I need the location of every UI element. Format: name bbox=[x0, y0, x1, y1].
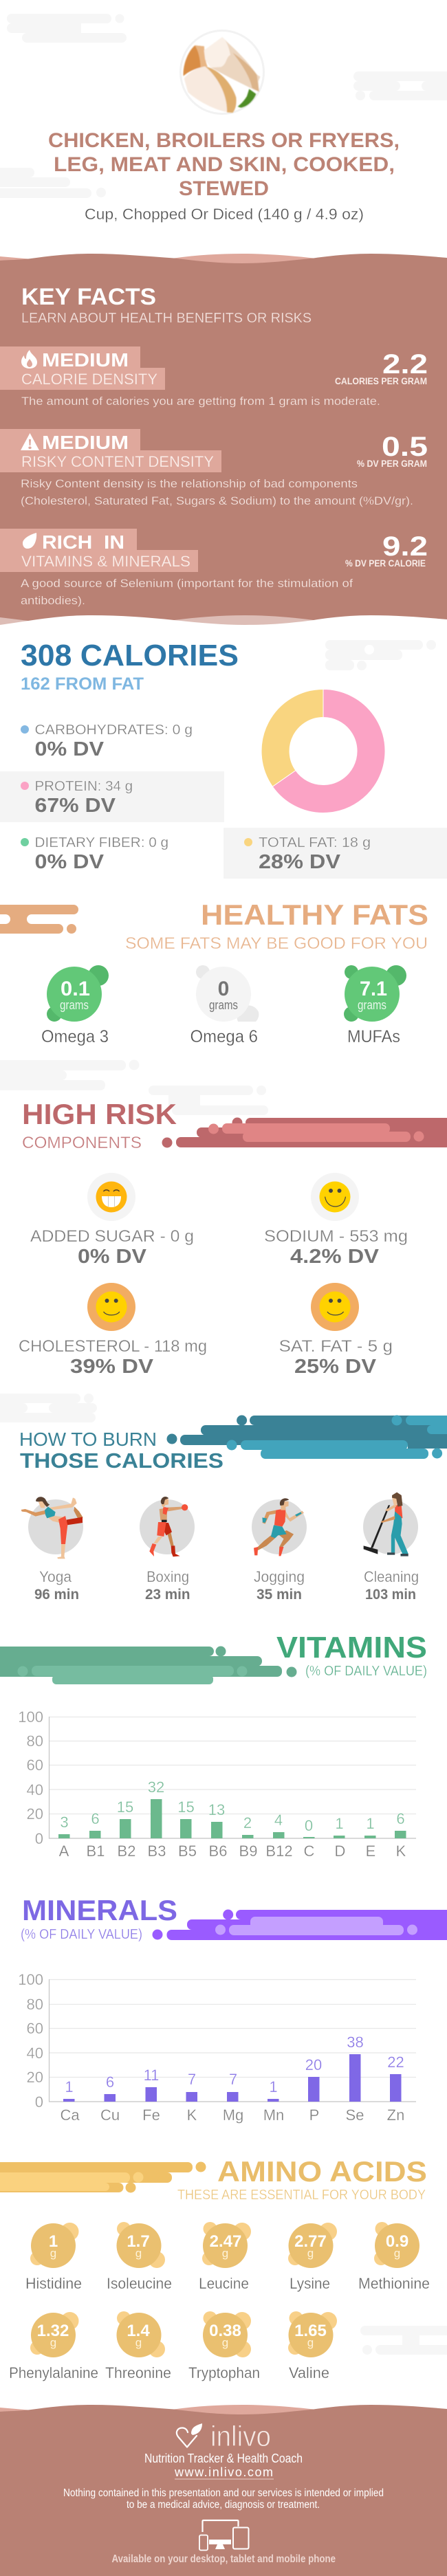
icon: yoga figure bbox=[21, 1497, 83, 1559]
website link: www.inlivo.com bbox=[174, 2465, 273, 2479]
activity: jogging: 35 min bbox=[257, 1587, 302, 1603]
heading: high risk: COMPONENTS bbox=[22, 1134, 142, 1152]
fact: rich in vitamins and minerals: antibodies). bbox=[21, 594, 85, 607]
heading: vitamins: (% OF DAILY VALUE) bbox=[305, 1664, 427, 1679]
donut chart bbox=[261, 689, 385, 813]
bar chart: vitamins: B6 bbox=[209, 1842, 227, 1860]
bar chart: minerals: 40 bbox=[27, 2045, 43, 2062]
bar chart: vitamins: 40 bbox=[27, 1781, 43, 1798]
bar chart: minerals: 7 bbox=[188, 2071, 196, 2088]
logo: inlivo: inlivo bbox=[210, 2420, 271, 2452]
icon: mild smile face bbox=[96, 1291, 127, 1323]
heading: healthy fats: HEALTHY FATS bbox=[201, 899, 428, 931]
serving size subtitle: Cup, Chopped Or Diced (140 g / 4.9 oz) bbox=[85, 206, 364, 223]
amino: phenylalanine: g bbox=[50, 2336, 56, 2349]
panel: minerals bbox=[18, 1894, 447, 2124]
macro: carbohydrates: CARBOHYDRATES: 0 g bbox=[34, 723, 193, 738]
bar chart: vitamins: 15 bbox=[117, 1798, 133, 1816]
bar chart: minerals: 20 bbox=[27, 2069, 43, 2086]
disclaimer bbox=[63, 2487, 384, 2511]
fact: calorie density: CALORIE DENSITY bbox=[21, 371, 157, 388]
icon: flame bbox=[21, 350, 37, 368]
bar chart: vitamins: 3 bbox=[60, 1814, 69, 1831]
panel: high risk components bbox=[0, 1060, 447, 1378]
amino: methionine: 0.9 bbox=[386, 2232, 408, 2251]
fact: rich in vitamins and minerals: A good source of Selenium (important for the stimulation of bbox=[21, 577, 353, 590]
bar chart: vitamins: 4 bbox=[274, 1812, 283, 1829]
panel: how to burn calories bbox=[0, 1394, 447, 1603]
activity: boxing: 23 min bbox=[145, 1587, 190, 1603]
fact: risky content density: MEDIUM bbox=[42, 432, 129, 453]
bar chart: vitamins: 80 bbox=[27, 1732, 43, 1750]
stat: omega 6: grams bbox=[209, 998, 238, 1012]
amino: valine bbox=[288, 2311, 337, 2381]
title: STEWED bbox=[179, 177, 269, 200]
fact: calorie density: 2.2 bbox=[382, 349, 428, 379]
bar chart: minerals: Zn bbox=[387, 2106, 404, 2124]
bar chart: minerals: 22 bbox=[387, 2054, 404, 2071]
macro: dietary fiber: 0% DV bbox=[34, 851, 105, 873]
bar chart: minerals: 1 bbox=[269, 2078, 278, 2095]
bar chart: vitamins: B5 bbox=[178, 1842, 197, 1860]
tagline: Nutrition Tracker & Health Coach bbox=[144, 2452, 303, 2465]
heading: high risk bbox=[22, 1098, 177, 1152]
fact: calorie density bbox=[0, 346, 428, 408]
amino: threonine: 1.4 bbox=[127, 2322, 150, 2340]
bar chart: minerals: Mg bbox=[223, 2106, 243, 2124]
risk: sodium: SODIUM - 553 mg bbox=[264, 1227, 408, 1246]
amino: threonine: Threonine bbox=[105, 2364, 171, 2381]
risk: saturated fat: SAT. FAT - 5 g bbox=[279, 1337, 393, 1356]
heading: vitamins: VITAMINS bbox=[276, 1631, 427, 1664]
banner: healthy fats bbox=[0, 905, 78, 934]
heading: healthy fats: SOME FATS MAY BE GOOD FOR YOU bbox=[125, 934, 428, 953]
heading: high risk: HIGH RISK bbox=[22, 1098, 177, 1130]
amino: lysine: g bbox=[307, 2247, 314, 2260]
risk: sodium: 4.2% DV bbox=[290, 1246, 380, 1268]
icon: grinning face bbox=[96, 1181, 127, 1213]
banner: how to burn bbox=[166, 1415, 447, 1459]
macro: total fat: 28% DV bbox=[259, 851, 341, 873]
macro: dietary fiber: DIETARY FIBER: 0 g bbox=[34, 835, 168, 850]
bar chart: minerals: Fe bbox=[142, 2106, 160, 2124]
stat: mufas bbox=[344, 965, 406, 1046]
macro: total fat: TOTAL FAT: 18 g bbox=[259, 835, 371, 850]
heading: calories bbox=[21, 639, 239, 694]
bar chart: vitamins: B1 bbox=[87, 1842, 105, 1860]
panel: footer bbox=[0, 2405, 447, 2576]
activity: yoga bbox=[21, 1497, 83, 1603]
bar chart: minerals: 60 bbox=[27, 2020, 43, 2037]
icon: mild smile face bbox=[319, 1291, 351, 1323]
bar chart: vitamins: 32 bbox=[148, 1779, 164, 1796]
icon: boxing figure bbox=[149, 1497, 188, 1556]
stat: omega 6: Omega 6 bbox=[190, 1027, 258, 1046]
bar chart: vitamins: D bbox=[335, 1842, 345, 1860]
amino: methionine bbox=[358, 2222, 430, 2292]
macro: protein: PROTEIN: 34 g bbox=[34, 779, 133, 794]
heading: how to burn those calories: THOSE CALORIES bbox=[20, 1449, 224, 1473]
heading: healthy fats bbox=[125, 899, 428, 953]
bar chart: minerals: 6 bbox=[106, 2073, 114, 2091]
amino: leucine: 2.47 bbox=[210, 2232, 241, 2251]
fact: rich in vitamins and minerals: RICH IN bbox=[42, 531, 124, 553]
fact: rich in vitamins and minerals: % DV PER CALORIE bbox=[345, 558, 426, 569]
title: LEG, MEAT AND SKIN, COOKED, bbox=[54, 153, 395, 176]
amino: valine: 1.65 bbox=[294, 2322, 327, 2340]
amino: leucine bbox=[199, 2222, 251, 2292]
macro: carbohydrates: 0% DV bbox=[34, 738, 105, 760]
activity: yoga: 96 min bbox=[34, 1587, 79, 1603]
heading: amino acids bbox=[177, 2155, 427, 2203]
stat: omega 6: 0 bbox=[218, 978, 229, 1000]
bar chart: vitamins: 100 bbox=[18, 1708, 43, 1726]
availability note: Available on your desktop, tablet and mobile phone bbox=[111, 2553, 336, 2565]
icon: smiling face bbox=[319, 1181, 351, 1213]
activity: jogging: Jogging bbox=[254, 1568, 305, 1585]
bar chart: minerals: 38 bbox=[347, 2034, 364, 2051]
amino: histidine: g bbox=[50, 2247, 56, 2260]
amino: valine: g bbox=[307, 2336, 314, 2349]
heading: minerals bbox=[21, 1894, 177, 1942]
bar chart: minerals bbox=[18, 1971, 416, 2124]
bar chart: vitamins: 60 bbox=[27, 1757, 43, 1774]
heading: amino acids: AMINO ACIDS bbox=[217, 2155, 427, 2188]
logo: inlivo bbox=[177, 2420, 271, 2452]
disclaimer: Nothing contained in this presentation and our services is intended or implied bbox=[63, 2487, 384, 2499]
heading: minerals: MINERALS bbox=[22, 1894, 177, 1926]
fact: calorie density: The amount of calories you are getting from 1 gram is moderate. bbox=[21, 395, 380, 408]
bar chart: vitamins bbox=[18, 1708, 416, 1860]
panel: key facts bbox=[0, 254, 447, 630]
fact: rich in vitamins and minerals bbox=[0, 529, 428, 607]
amino: phenylalanine: Phenylalanine bbox=[9, 2364, 98, 2381]
panel: healthy fats bbox=[0, 899, 428, 1046]
bar chart: minerals: 1 bbox=[65, 2078, 74, 2095]
stat: omega 3 bbox=[41, 965, 109, 1046]
fact: rich in vitamins and minerals: 9.2 bbox=[382, 531, 428, 562]
panel: calories bbox=[0, 639, 447, 879]
stat: omega 6 bbox=[190, 965, 259, 1046]
banner: high risk bbox=[162, 1118, 447, 1148]
risk: cholesterol bbox=[19, 1283, 207, 1378]
bar chart: vitamins: B3 bbox=[148, 1842, 166, 1860]
bar chart: minerals: K bbox=[187, 2106, 197, 2124]
risk: sodium bbox=[264, 1173, 408, 1268]
heading: vitamins bbox=[276, 1631, 427, 1679]
panel: header bbox=[0, 14, 447, 223]
bar chart: vitamins: C bbox=[304, 1842, 315, 1860]
icon: warning triangle bbox=[21, 433, 39, 450]
fact: calorie density: CALORIES PER GRAM bbox=[335, 376, 427, 386]
heading: amino acids: THESE ARE ESSENTIAL FOR YOUR BODY bbox=[177, 2188, 426, 2203]
risk: cholesterol: CHOLESTEROL - 118 mg bbox=[19, 1337, 207, 1356]
icon: cleaning figure bbox=[364, 1493, 408, 1556]
bar chart: minerals: 100 bbox=[18, 1971, 43, 1988]
bar chart: minerals: 11 bbox=[144, 2067, 159, 2084]
amino: threonine bbox=[105, 2311, 171, 2381]
bar chart: vitamins: 1 bbox=[335, 1815, 344, 1832]
amino: methionine: g bbox=[394, 2247, 400, 2260]
stat: mufas: MUFAs bbox=[347, 1027, 400, 1046]
bar chart: minerals: Ca bbox=[60, 2106, 80, 2124]
amino: isoleucine bbox=[107, 2222, 172, 2292]
bar chart: minerals: 80 bbox=[27, 1996, 43, 2013]
bar chart: vitamins: 2 bbox=[243, 1814, 252, 1831]
disclaimer: to be a medical advice, diagnosis or treatment. bbox=[127, 2499, 320, 2511]
activity: yoga: Yoga bbox=[39, 1568, 72, 1585]
bar chart: minerals: 0 bbox=[35, 2093, 43, 2111]
icon: devices bbox=[199, 2520, 249, 2551]
bar chart: vitamins: 0 bbox=[35, 1830, 43, 1847]
macro: protein: 67% DV bbox=[34, 795, 116, 817]
title: CHICKEN, BROILERS OR FRYERS, bbox=[48, 129, 400, 152]
banner: amino acids bbox=[0, 2161, 206, 2193]
amino: histidine bbox=[25, 2223, 82, 2292]
key facts heading: LEARN ABOUT HEALTH BENEFITS OR RISKS bbox=[21, 311, 312, 326]
title bbox=[48, 129, 400, 200]
amino: lysine: 2.77 bbox=[294, 2232, 327, 2251]
bar chart: vitamins: B9 bbox=[239, 1842, 257, 1860]
activity: cleaning bbox=[363, 1493, 419, 1603]
risk: added sugar: ADDED SUGAR - 0 g bbox=[30, 1227, 194, 1246]
stat: omega 3: 0.1 bbox=[61, 978, 90, 1000]
amino: methionine: Methionine bbox=[358, 2275, 430, 2292]
amino: leucine: g bbox=[222, 2247, 228, 2260]
activity: boxing: Boxing bbox=[146, 1568, 189, 1585]
fact: risky content density bbox=[0, 429, 428, 507]
bar chart: minerals: Mn bbox=[263, 2106, 284, 2124]
bar chart: vitamins: 13 bbox=[208, 1801, 225, 1818]
fact: calorie density: MEDIUM bbox=[42, 349, 129, 371]
amino: isoleucine: g bbox=[135, 2247, 142, 2260]
bar chart: minerals: 7 bbox=[229, 2071, 237, 2088]
heading: how to burn those calories bbox=[19, 1429, 224, 1473]
amino: tryptophan bbox=[188, 2311, 260, 2381]
amino: lysine bbox=[288, 2223, 337, 2292]
bar chart: minerals: 20 bbox=[305, 2056, 322, 2073]
amino: phenylalanine bbox=[9, 2312, 98, 2381]
bar chart: vitamins: 0 bbox=[305, 1817, 313, 1834]
risk: added sugar bbox=[30, 1173, 194, 1268]
risk: added sugar: 0% DV bbox=[78, 1246, 147, 1268]
macro: protein bbox=[0, 771, 224, 822]
amino: lysine: Lysine bbox=[290, 2275, 330, 2292]
amino: valine: Valine bbox=[289, 2364, 329, 2381]
bar chart: vitamins: 6 bbox=[91, 1810, 100, 1827]
macro: carbohydrates bbox=[21, 723, 193, 760]
banner: minerals bbox=[153, 1910, 447, 1940]
key facts heading bbox=[21, 284, 312, 326]
fact: rich in vitamins and minerals: VITAMINS & MINERALS bbox=[21, 553, 190, 570]
amino: histidine: 1 bbox=[49, 2232, 58, 2251]
bar chart: vitamins: B12 bbox=[265, 1842, 293, 1860]
activity: jogging bbox=[252, 1498, 307, 1603]
bar chart: vitamins: E bbox=[366, 1842, 375, 1860]
activity: boxing bbox=[140, 1497, 195, 1603]
stat: omega 3: grams bbox=[60, 998, 89, 1012]
bar chart: vitamins: B2 bbox=[118, 1842, 135, 1860]
icon: jogging figure bbox=[254, 1498, 304, 1556]
amino: isoleucine: 1.7 bbox=[127, 2232, 150, 2251]
key facts heading: KEY FACTS bbox=[21, 284, 156, 310]
amino: leucine: Leucine bbox=[199, 2275, 249, 2292]
macro: dietary fiber bbox=[21, 835, 168, 873]
stat: mufas: 7.1 bbox=[360, 978, 387, 1000]
amino: tryptophan: Tryptophan bbox=[188, 2364, 260, 2381]
amino: histidine: Histidine bbox=[25, 2275, 82, 2292]
stat: mufas: grams bbox=[358, 998, 386, 1012]
amino: tryptophan: 0.38 bbox=[209, 2322, 241, 2340]
panel: amino acids bbox=[0, 2155, 447, 2381]
heading: calories: 162 FROM FAT bbox=[21, 674, 144, 694]
bar chart: minerals: Cu bbox=[100, 2106, 120, 2124]
activity: cleaning: Cleaning bbox=[364, 1568, 419, 1585]
amino: isoleucine: Isoleucine bbox=[107, 2275, 172, 2292]
bar chart: vitamins: A bbox=[59, 1842, 69, 1860]
panel: vitamins bbox=[0, 1631, 427, 1860]
bar chart: vitamins: 1 bbox=[366, 1815, 375, 1832]
heading: how to burn those calories: HOW TO BURN bbox=[19, 1429, 157, 1450]
fact: risky content density: (Cholesterol, Saturated Fat, Sugars & Sodium) to the amount (%DV/gr). bbox=[21, 494, 413, 507]
amino: phenylalanine: 1.32 bbox=[37, 2322, 69, 2340]
heading: calories: 308 CALORIES bbox=[21, 639, 239, 672]
risk: saturated fat bbox=[279, 1283, 393, 1378]
bar chart: vitamins: 6 bbox=[396, 1810, 405, 1827]
bar chart: minerals: Se bbox=[346, 2106, 364, 2124]
macro: total fat bbox=[224, 828, 447, 879]
fact: risky content density: RISKY CONTENT DENSITY bbox=[21, 453, 214, 470]
banner: vitamins bbox=[0, 1646, 297, 1684]
bar chart: minerals: P bbox=[309, 2106, 319, 2124]
heading: minerals: (% OF DAILY VALUE) bbox=[21, 1927, 142, 1942]
icon: chicken photo bbox=[180, 30, 264, 114]
bar chart: vitamins: 15 bbox=[177, 1798, 195, 1816]
icon: leaf bbox=[23, 533, 36, 549]
fact: risky content density: Risky Content density is the relationship of bad components bbox=[21, 477, 358, 490]
amino: threonine: g bbox=[135, 2336, 142, 2349]
bar chart: vitamins: K bbox=[396, 1842, 406, 1860]
fact: risky content density: % DV PER GRAM bbox=[357, 459, 427, 469]
fact: risky content density: 0.5 bbox=[382, 432, 428, 462]
risk: saturated fat: 25% DV bbox=[294, 1356, 377, 1378]
risk: cholesterol: 39% DV bbox=[70, 1356, 154, 1378]
stat: omega 3: Omega 3 bbox=[41, 1027, 109, 1046]
amino: tryptophan: g bbox=[222, 2336, 228, 2349]
bar chart: vitamins: 20 bbox=[27, 1805, 43, 1823]
activity: cleaning: 103 min bbox=[365, 1587, 416, 1603]
